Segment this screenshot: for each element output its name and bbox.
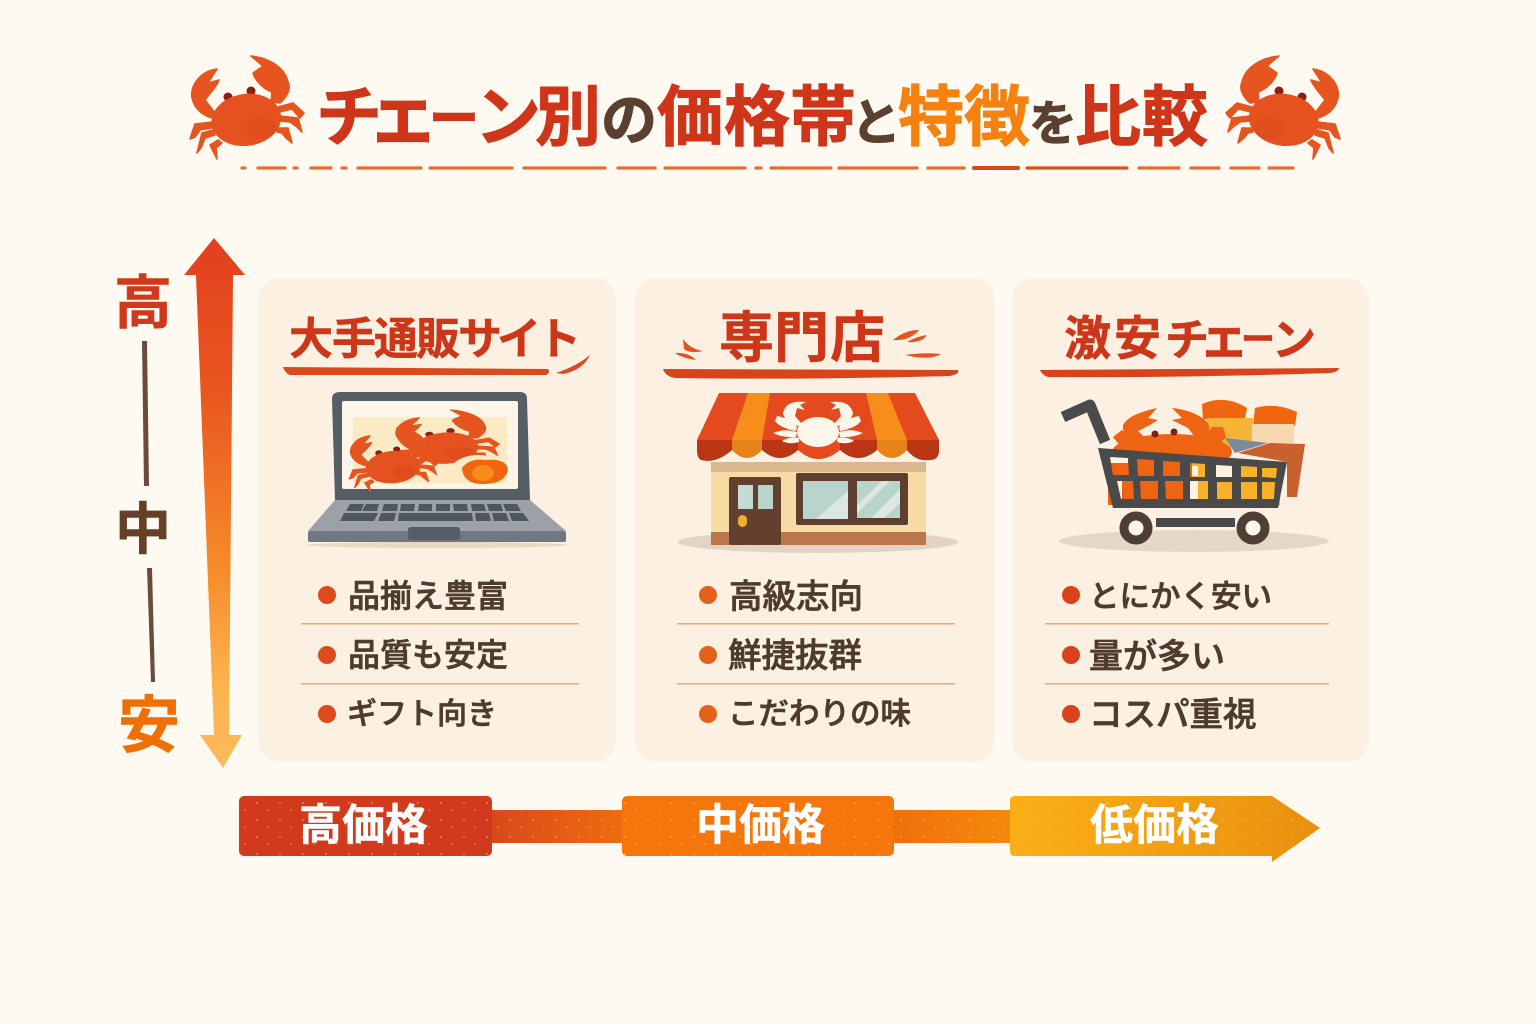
feature list <box>1045 580 1329 734</box>
label low: 低価格 <box>1090 802 1219 850</box>
title text: の <box>601 89 657 152</box>
axis label: mid: 中 <box>115 498 171 561</box>
icon: storefront <box>678 393 958 553</box>
title text: チ <box>316 80 382 154</box>
icon: shopping cart <box>1059 400 1329 552</box>
high price box <box>239 796 492 856</box>
heading: チ <box>1165 316 1209 365</box>
label mid: 中価格 <box>696 802 825 850</box>
title text: ェ <box>367 76 439 156</box>
heading: 激安 <box>1064 312 1161 365</box>
title block <box>190 56 1340 168</box>
icon: crab left <box>190 56 304 159</box>
heading: 専門店 <box>719 307 885 369</box>
feature list: 品揃え豊富 <box>348 578 508 614</box>
title text: ン別 <box>475 80 601 154</box>
label high: 高価格 <box>299 802 428 850</box>
panel: major mail order <box>258 278 616 762</box>
feature list <box>301 578 579 731</box>
feature list: こだわりの味 <box>728 697 911 731</box>
price axis <box>114 238 245 768</box>
low price arrow box <box>1010 796 1320 862</box>
title text: ー <box>429 91 479 147</box>
panel: discount chain <box>1012 278 1369 762</box>
feature list <box>677 579 955 731</box>
feature list: 鮮捷抜群 <box>728 638 862 675</box>
feature list: コスパ重視 <box>1089 697 1256 734</box>
heading underline <box>663 369 958 379</box>
axis label: high: 高 <box>114 271 172 336</box>
axis label: low: 安 <box>118 692 180 761</box>
feature list: 量が多い <box>1089 638 1225 676</box>
axis line upper <box>142 341 149 486</box>
axis line lower <box>147 568 155 682</box>
price gradient arrow <box>184 238 245 768</box>
heading underline <box>283 355 590 375</box>
heading: 大手通販サイト <box>289 315 581 364</box>
title text: と <box>851 95 901 151</box>
icon: white crab logo <box>773 402 863 447</box>
title text: 比較 <box>1075 80 1208 154</box>
feature list: ギフト向き <box>347 698 497 731</box>
mid price box <box>622 796 894 856</box>
icon: laptop <box>307 392 567 548</box>
heading accents <box>675 330 941 360</box>
speckle texture <box>239 796 1320 862</box>
feature list: とにかく安い <box>1089 580 1272 614</box>
heading: ー <box>1241 321 1275 359</box>
heading: ェ <box>1199 310 1249 366</box>
title text: 特徴 <box>898 80 1030 154</box>
connector high to mid <box>490 810 624 843</box>
price level bar <box>239 796 1320 862</box>
feature list: 品質も安定 <box>348 637 508 673</box>
panel: specialty store <box>635 278 994 762</box>
title dashed underline <box>242 166 1293 170</box>
title text: を <box>1029 98 1077 151</box>
feature list: 高級志向 <box>729 579 863 616</box>
heading: ン <box>1272 316 1316 365</box>
icon: crab right <box>1226 56 1340 159</box>
connector mid to low <box>892 810 1012 843</box>
title text: 価格帯 <box>657 80 856 154</box>
heading underline <box>1040 368 1339 377</box>
